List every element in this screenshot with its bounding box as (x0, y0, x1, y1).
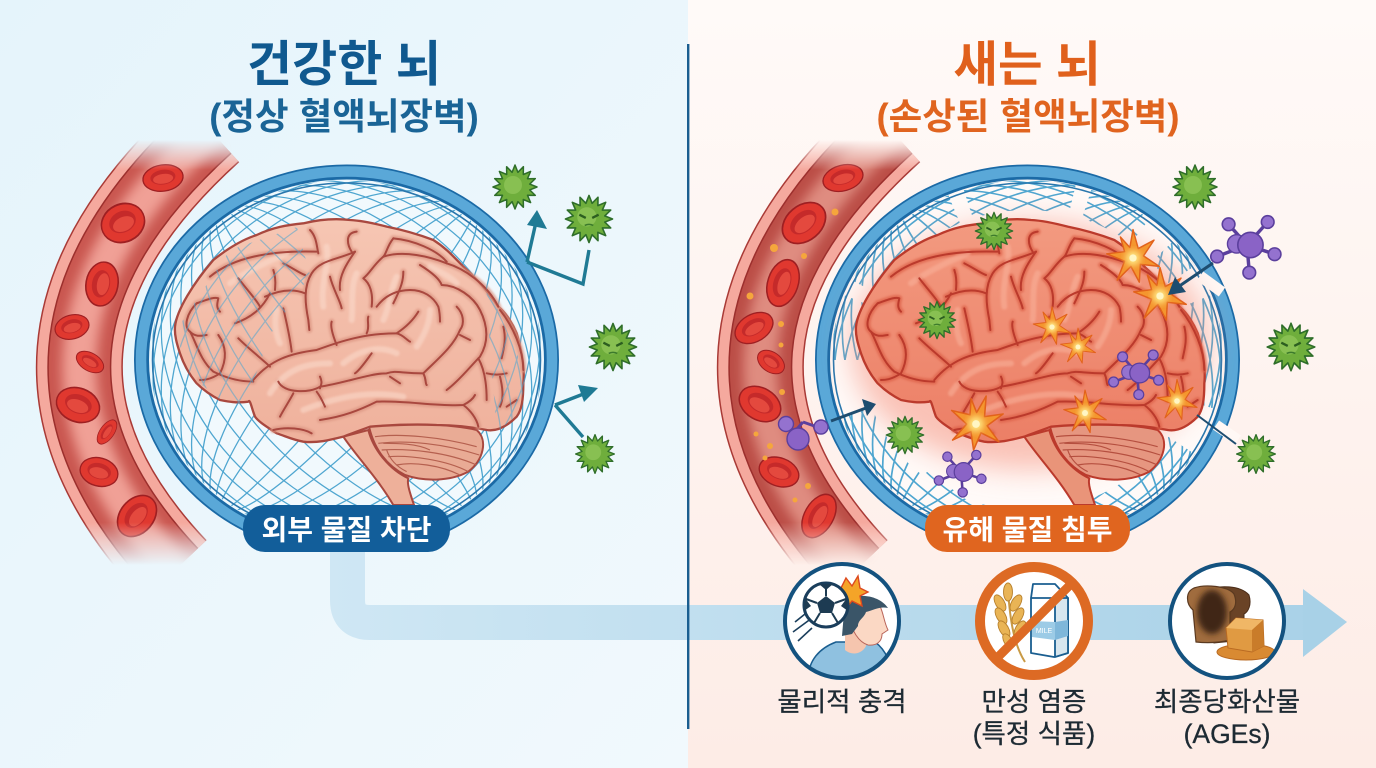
blood vessel: leaky (730, 130, 891, 570)
viruses outside healthy barrier (493, 165, 637, 473)
label: physical impact: 물리적 충격 (777, 687, 907, 717)
blood vessel: healthy (52, 130, 210, 570)
barrier breaks (1200, 276, 1238, 440)
red blood cells (52, 162, 185, 544)
mesh overlay on healthy brain (180, 228, 526, 430)
icon: burnt toast and caramel (1169, 563, 1285, 679)
soccer ball (804, 583, 848, 627)
label: chronic inflammation: 만성 염증 (982, 687, 1086, 717)
milk carton: MILE (1036, 628, 1052, 635)
label: chronic inflammation (973, 687, 1095, 749)
panel: healthy brain background (0, 0, 688, 768)
label: chronic inflammation: (특정 식품) (973, 719, 1095, 749)
red blood cells and leaking particles (730, 160, 866, 544)
icon: food inflammation (978, 565, 1090, 677)
label: advanced glycation end products: (AGEs) (1184, 719, 1270, 749)
label pill: harmful substances infiltrate: 유해 물질 침투 (942, 514, 1113, 546)
barrier: damaged mesh sphere (815, 164, 1240, 532)
brain glow (850, 220, 1210, 470)
label pill: blocks external substances (243, 505, 450, 552)
subtitle: damaged blood-brain barrier: (손상된 혈액뇌장벽) (876, 96, 1180, 137)
title: leaky brain: 새는 뇌 (953, 38, 1101, 92)
molecules: toxins (778, 216, 1281, 497)
label: advanced glycation end products: 최종당화산물 (1154, 687, 1300, 717)
arrows: substances entering (831, 263, 1236, 444)
title: healthy brain: 건강한 뇌 (247, 38, 441, 92)
icon: physical impact (784, 563, 900, 680)
subtitle: normal blood-brain barrier: (정상 혈액뇌장벽) (209, 96, 479, 137)
panel: leaky brain background (688, 0, 1376, 768)
arrow: causes flow arrow (348, 550, 1347, 657)
brain: healthy (175, 219, 524, 505)
label: advanced glycation end products (1154, 687, 1300, 749)
center divider line (687, 44, 689, 729)
label pill: harmful substances infiltrate (925, 505, 1130, 552)
arrows: pathogens deflected (527, 210, 598, 437)
barrier: intact mesh sphere (134, 164, 559, 531)
wheat (992, 583, 1028, 662)
brain: inflamed (856, 219, 1205, 505)
starbursts: damage points (942, 230, 1197, 457)
label pill: blocks external substances: 외부 물질 차단 (261, 514, 432, 546)
viruses in and around leaky brain (886, 165, 1315, 473)
